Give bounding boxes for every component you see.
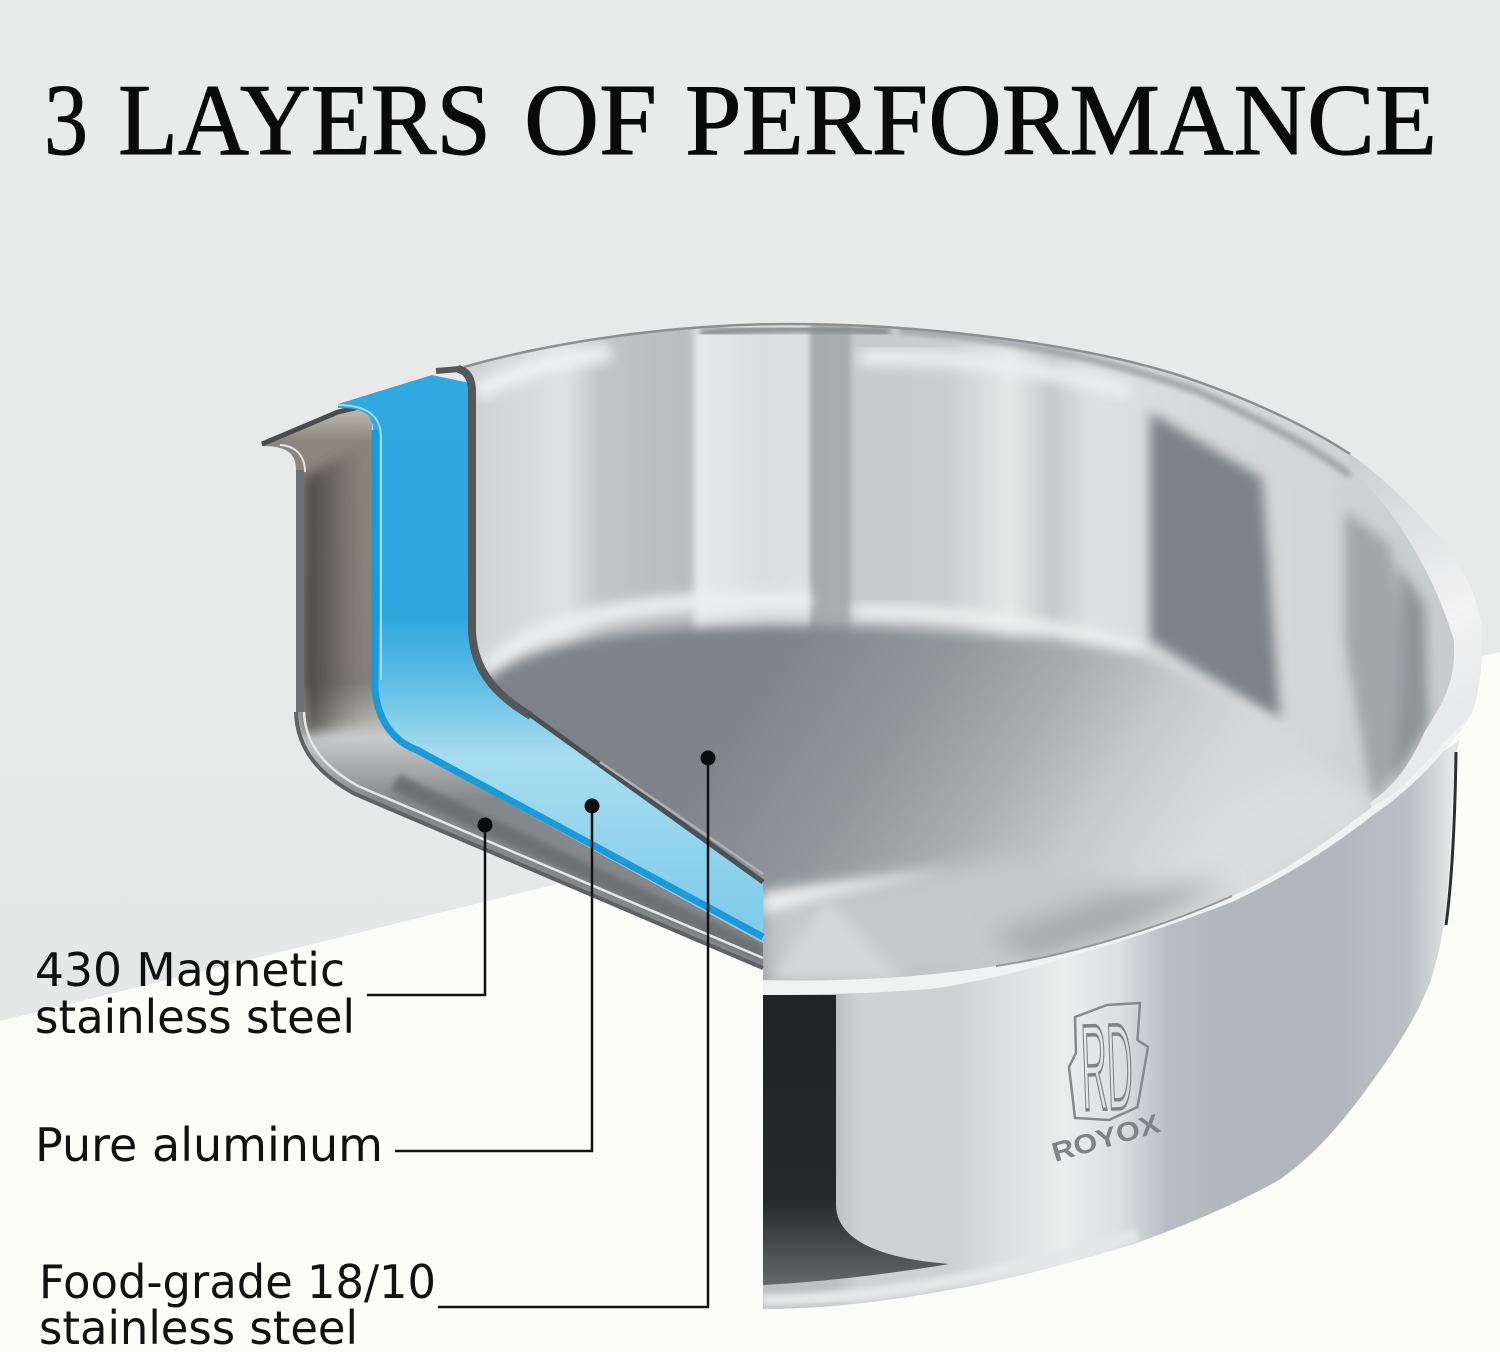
floor: lit area right: [1170, 770, 1373, 895]
logo: Royox: [1048, 998, 1163, 1168]
layer: inner 18/10 food-grade steel edge: [436, 369, 763, 882]
title: OF: [524, 64, 657, 177]
title: 3: [44, 64, 88, 177]
wall: upper rim shading: [700, 329, 890, 333]
callout: 430 magnetic stainless steel: [35, 818, 492, 1044]
wall: dark reflections right: [1150, 412, 1280, 720]
pan front rim: [763, 713, 1472, 995]
pan rim outline: [464, 324, 1350, 966]
pan interior: [466, 326, 1482, 980]
floor: lit area front: [763, 862, 1010, 980]
layer: outer 430 magnetic stainless steel: [262, 402, 763, 968]
pan floor: [488, 617, 1276, 980]
pan rim right band: [1350, 454, 1482, 811]
layer: pure aluminum (blue): [338, 375, 763, 943]
callout: food-grade 18/10 stainless steel: [39, 750, 716, 1352]
wall: lower highlight band: [490, 600, 810, 668]
title: [44, 64, 1437, 177]
title: LAYERS: [118, 64, 491, 177]
callout: food-grade 18/10 stainless steel: Food-grade 18/10: [39, 1255, 436, 1309]
floor: radial centre ray: [763, 870, 950, 915]
right dark edge: [1446, 752, 1456, 925]
logo: Royox: ROYOX: [1048, 1108, 1163, 1168]
title: PERFORMANCE: [685, 64, 1437, 177]
callout: 430 magnetic stainless steel: stainless steel: [35, 990, 355, 1044]
callout: 430 magnetic stainless steel: 430 Magnetic: [35, 943, 345, 997]
infographic canvas: RD: [1079, 998, 1135, 1136]
dark reflection band: [763, 995, 949, 1285]
callout: pure aluminum: Pure aluminum: [35, 1118, 383, 1172]
bottom lip highlight: [763, 1235, 1137, 1300]
pan exterior wall: [763, 740, 1460, 1309]
callout: pure aluminum: [35, 798, 600, 1172]
